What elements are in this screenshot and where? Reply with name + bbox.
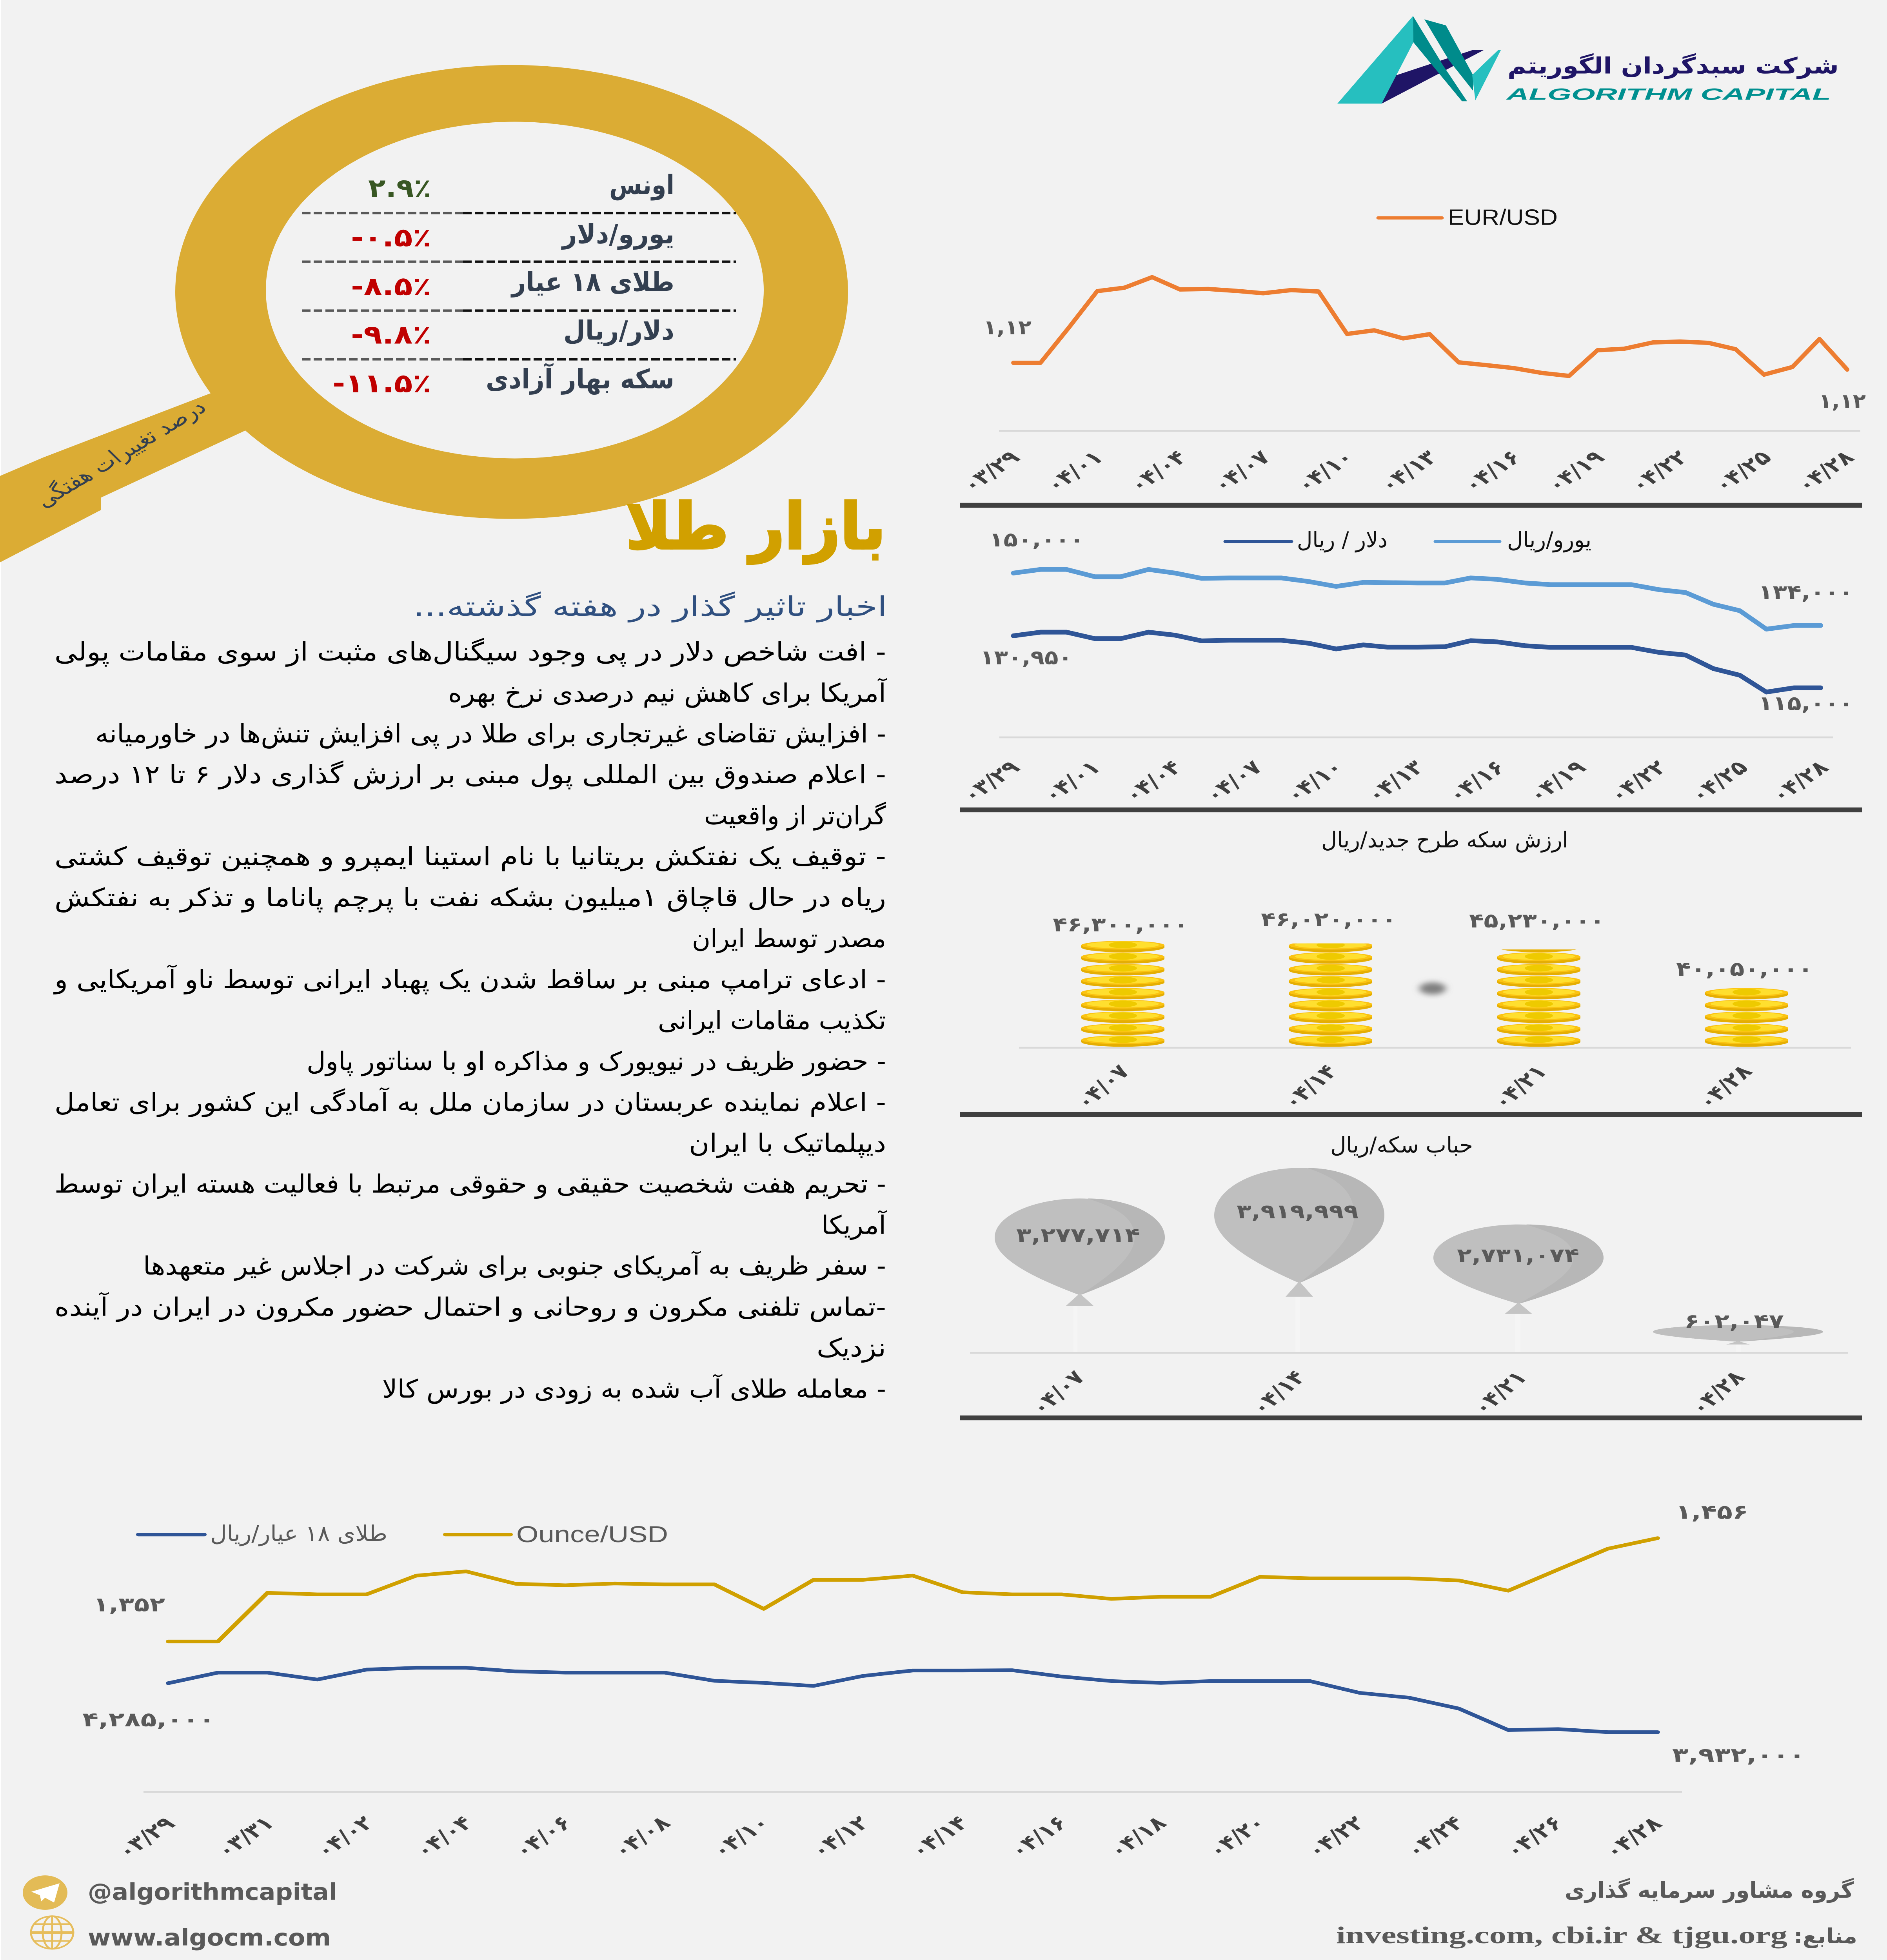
value labels: ۴۵,۲۳۰,۰۰۰	[1469, 909, 1605, 932]
news list: ریاه در حال قاچاق ۱میلیون بشکه نفت با پرچم پاناما و تذکر به نفتکش	[54, 882, 886, 913]
date labels: ۰۴/۰۷	[1199, 756, 1268, 807]
end value: ۱,۱۲	[1819, 389, 1866, 413]
date labels: ۰۳/۲۹	[112, 1812, 180, 1863]
date labels: ۰۴/۲۸	[1685, 1366, 1750, 1419]
row: 18 carat gold: طلای ۱۸ عیار	[510, 266, 674, 298]
value labels: ۴۶,۳۰۰,۰۰۰	[1053, 913, 1188, 936]
date labels: ۰۴/۲۰	[1202, 1811, 1271, 1862]
date labels: ۰۴/۲۲	[1604, 756, 1672, 807]
axis line	[999, 737, 1833, 738]
news list: - اعلام صندوق بین المللی پول مبنی بر ارزش گذاری دلار ۶ تا ۱۲ درصد	[54, 760, 886, 790]
value labels: ۲,۷۳۱,۰۷۴	[1457, 1244, 1579, 1267]
news list: -تماس تلفنی مکرون و روحانی و احتمال حضور مکرون در ایران در آینده	[54, 1292, 886, 1322]
balloon 2	[1214, 1168, 1384, 1353]
legend	[1226, 527, 1591, 553]
date labels: ۰۴/۱۳	[1361, 756, 1429, 807]
legend: Ounce/USD	[516, 1522, 668, 1547]
telegram handle: @algorithmcapital	[88, 1879, 337, 1906]
news list: - سفر ظریف به آمریکای جنوبی برای شرکت در اجلاس غیر متعهدها	[143, 1250, 886, 1281]
date labels	[1025, 1366, 1750, 1419]
value labels: ۱۳۰,۹۵۰	[980, 646, 1072, 669]
date labels: ۰۴/۲۸	[1791, 446, 1860, 497]
date labels: ۰۴/۲۱	[1487, 1060, 1553, 1113]
logo: Algorithm Capital	[1337, 16, 1839, 103]
legend: EUR/USD	[1448, 205, 1558, 230]
date labels: ۰۴/۰۷	[1070, 1060, 1135, 1113]
value labels: ۱۱۵,۰۰۰	[1758, 691, 1853, 715]
magnifier: weekly change panel	[0, 65, 848, 563]
value labels	[1016, 1200, 1784, 1333]
news list: - معامله طلای آب شده به زودی در بورس کالا	[382, 1374, 886, 1404]
date labels: ۰۴/۲۱	[1467, 1366, 1533, 1419]
chart: gold and ounce	[82, 1500, 1805, 1863]
row: dollar rial: دلار/ریال	[563, 315, 674, 346]
icon: globe	[31, 1916, 73, 1949]
row dividers	[302, 213, 736, 359]
gold rial series	[168, 1668, 1658, 1732]
news list: - توقیف یک نفتکش بریتانیا با نام استینا ایمپرو و همچنین توقیف کشتی	[54, 842, 886, 871]
main heading: بازار طلا	[626, 490, 886, 564]
news list: - تحریم هفت شخصیت حقیقی و حقوقی مرتبط با فعالیت هسته ایران توسط	[54, 1169, 886, 1199]
news heading: اخبار تاثیر گذار در هفته گذشته...	[413, 590, 887, 622]
date labels: ۰۴/۱۹	[1523, 756, 1591, 807]
news list: گران‌تر از واقعیت	[704, 801, 886, 831]
axis line	[999, 430, 1860, 432]
row: ounce	[368, 169, 674, 203]
date labels: ۰۴/۱۰	[1291, 446, 1359, 497]
row: euro dollar: -۰.۵٪	[351, 223, 431, 253]
row: euro dollar: یورو/دلار	[561, 219, 674, 250]
date labels: ۰۴/۱۳	[1374, 446, 1443, 497]
date labels: ۰۴/۰۴	[409, 1811, 478, 1862]
date labels: ۰۴/۲۴	[1400, 1811, 1469, 1862]
value labels	[82, 1500, 1805, 1766]
news list: آمریکا برای کاهش نیم درصدی نرخ بهره	[448, 678, 887, 708]
handle caption: درصد تغییرات هفتگی	[29, 395, 212, 512]
row: bahar azadi coin: -۱۱.۵٪	[332, 368, 431, 399]
date labels: ۰۴/۰۸	[607, 1811, 676, 1862]
date labels: ۰۳/۲۹	[957, 446, 1025, 497]
chart: dollar and euro in rial	[957, 527, 1853, 807]
line series	[1013, 277, 1847, 376]
date labels: ۰۴/۲۸	[1692, 1060, 1758, 1113]
date labels: ۰۴/۱۶	[1458, 446, 1526, 497]
date labels: ۰۴/۰۴	[1124, 446, 1192, 497]
value labels: ۱,۳۵۲	[93, 1593, 165, 1616]
date labels: ۰۴/۰۶	[509, 1811, 577, 1862]
value labels: ۳,۹۳۲,۰۰۰	[1672, 1743, 1805, 1766]
date labels: ۰۴/۲۸	[1765, 756, 1834, 807]
ounce series	[168, 1538, 1658, 1641]
axis line	[1019, 1047, 1851, 1049]
value labels: ۴,۲۸۵,۰۰۰	[82, 1708, 215, 1731]
chart: coin bubble balloons	[970, 1132, 1848, 1419]
magnifier ring	[175, 65, 848, 519]
date labels: ۰۴/۰۷	[1207, 446, 1276, 497]
news list: دیپلماتیک با ایران	[689, 1128, 886, 1158]
value labels	[1053, 907, 1813, 980]
date labels: ۰۴/۱۴	[1277, 1060, 1343, 1113]
legend: یورو/ریال	[1507, 527, 1591, 553]
website: www.algocm.com	[88, 1924, 331, 1951]
legend: طلای ۱۸ عیار/ریال	[210, 1521, 387, 1546]
value labels	[980, 528, 1853, 715]
magnifier handle	[0, 390, 255, 563]
date labels: ۰۴/۲۲	[1301, 1811, 1370, 1862]
footer: sources: منابع:	[1794, 1924, 1857, 1948]
date labels: ۰۳/۲۹	[957, 756, 1025, 807]
date labels: ۰۴/۰۱	[1037, 756, 1106, 807]
logo mark	[1337, 16, 1501, 103]
date labels	[112, 1811, 1667, 1863]
date labels: ۰۴/۲۸	[1599, 1812, 1667, 1863]
balloon 1	[995, 1198, 1165, 1353]
row: ounce: ۲.۹٪	[368, 173, 431, 203]
news list: - حضور ظریف در نیویورک و مذاکره او با سناتور پاول	[307, 1046, 886, 1076]
row: dollar rial	[351, 315, 674, 350]
date labels: ۰۴/۲۵	[1685, 756, 1753, 807]
date labels: ۰۴/۱۸	[1103, 1811, 1172, 1862]
coin stack 1	[1081, 941, 1164, 1047]
euro/rial series	[1013, 570, 1821, 629]
date labels: ۰۴/۱۲	[806, 1811, 874, 1862]
news list: آمریکا	[821, 1210, 887, 1240]
coin stack 4	[1705, 988, 1788, 1047]
row: ounce: اونس	[609, 169, 674, 200]
value labels: ۱۵۰,۰۰۰	[989, 528, 1084, 551]
magnifier lens	[266, 122, 764, 458]
news list: - ادعای ترامپ مبنی بر ساقط شدن یک پهباد ایرانی توسط ناو آمریکایی و	[53, 964, 886, 995]
date labels: ۰۴/۰۲	[310, 1811, 379, 1862]
value labels: ۱,۴۵۶	[1676, 1500, 1748, 1524]
date labels: ۰۴/۱۹	[1541, 446, 1610, 497]
date labels: ۰۴/۱۶	[1004, 1811, 1073, 1862]
news list	[53, 637, 887, 1404]
value labels: ۴۶,۰۲۰,۰۰۰	[1261, 907, 1397, 931]
value labels: ۳,۹۱۹,۹۹۹	[1237, 1200, 1358, 1223]
legend: دلار / ریال	[1297, 527, 1388, 553]
news list: - اعلام نماینده عربستان در سازمان ملل به آمادگی این کشور برای تعامل	[54, 1087, 886, 1117]
date labels: ۰۴/۰۷	[1025, 1366, 1091, 1419]
date labels: ۰۴/۱۰	[706, 1811, 775, 1862]
date labels: ۰۴/۱۶	[1442, 756, 1511, 807]
news list: - افت شاخص دلار در پی وجود سیگنال‌های مثبت از سوی مقامات پولی	[54, 637, 886, 667]
news list: نزدیک	[817, 1333, 886, 1363]
date labels: ۰۴/۱۴	[905, 1811, 973, 1862]
value labels: ۴۰,۰۵۰,۰۰۰	[1676, 957, 1813, 980]
value labels: ۳,۲۷۷,۷۱۴	[1016, 1223, 1140, 1247]
date labels	[957, 446, 1860, 497]
date labels: ۰۴/۲۵	[1708, 446, 1777, 497]
date labels	[1070, 1060, 1758, 1113]
date labels: ۰۴/۱۴	[1246, 1366, 1311, 1419]
logo persian name: شرکت سبدگردان الگوریتم	[1507, 53, 1839, 79]
axis line	[143, 1791, 1682, 1793]
date labels: ۰۳/۳۱	[211, 1811, 280, 1862]
date labels	[957, 756, 1834, 807]
chart: coin value pictogram	[1019, 828, 1851, 1113]
dollar/rial series	[1013, 632, 1821, 692]
news list: - افزایش تقاضای غیرتجاری برای طلا در پی افزایش تنش‌ها در خاورمیانه	[95, 719, 886, 749]
date labels: ۰۴/۲۶	[1500, 1811, 1568, 1862]
balloon 3	[1433, 1225, 1604, 1353]
row: dollar rial: -۹.۸٪	[351, 320, 431, 350]
blurred smudge	[1419, 982, 1446, 995]
date labels: ۰۴/۰۴	[1119, 756, 1187, 807]
legend	[138, 1521, 668, 1547]
footer: contact	[23, 1875, 337, 1951]
icon: telegram	[23, 1875, 67, 1910]
row: euro dollar	[351, 219, 674, 253]
value labels: ۱۳۴,۰۰۰	[1758, 580, 1853, 604]
chart: EUR/USD line	[957, 205, 1866, 497]
row: 18 carat gold	[351, 266, 674, 302]
news list: مصدر توسط ایران	[692, 924, 886, 953]
date labels: ۰۴/۱۰	[1280, 756, 1349, 807]
value labels: ۶۰۲,۰۴۷	[1684, 1310, 1784, 1333]
axis line	[970, 1352, 1848, 1354]
row: bahar azadi coin: سکه بهار آزادی	[486, 363, 674, 395]
balloon 4	[1653, 1325, 1823, 1353]
coin stack 3	[1497, 941, 1580, 1047]
logo english name: ALGORITHM CAPITAL	[1506, 85, 1831, 103]
row: bahar azadi coin	[332, 363, 674, 399]
date labels: ۰۴/۲۲	[1625, 446, 1693, 497]
start value: ۱,۱۲	[983, 316, 1032, 339]
news list: تکذیب مقامات ایرانی	[658, 1005, 886, 1035]
chart title: حباب سکه/ریال	[1330, 1132, 1473, 1158]
coin stack 2	[1289, 941, 1372, 1047]
row: 18 carat gold: -۸.۵٪	[351, 272, 431, 302]
footer: sources: investing.com, cbi.ir & tjgu.org	[1336, 1922, 1787, 1949]
date labels: ۰۴/۰۱	[1040, 446, 1109, 497]
chart title: ارزش سکه طرح جدید/ریال	[1321, 828, 1568, 853]
